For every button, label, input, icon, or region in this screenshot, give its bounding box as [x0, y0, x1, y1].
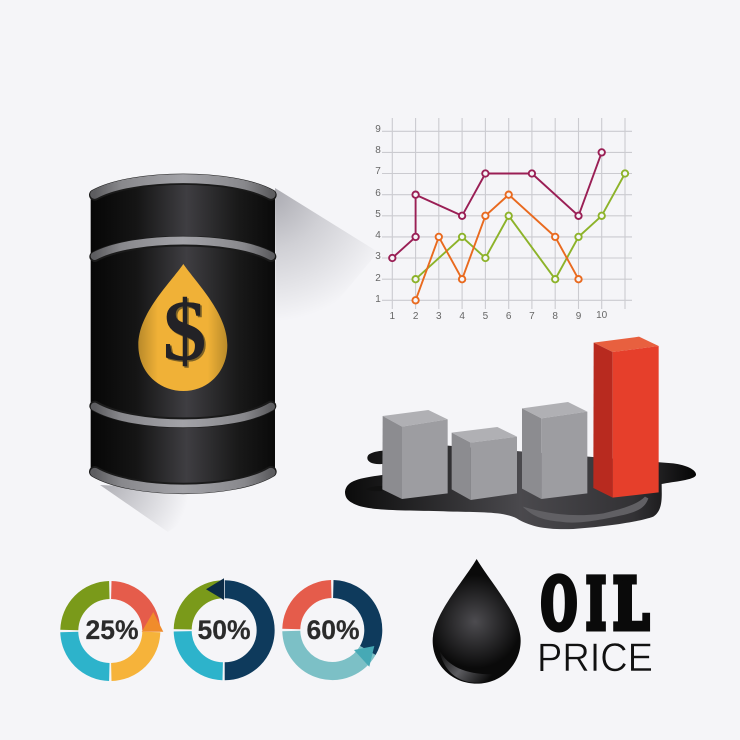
y axis labels: 3	[375, 251, 381, 262]
y axis labels: 2	[375, 273, 381, 284]
OIL	[541, 562, 649, 646]
x axis labels: 2	[413, 311, 419, 322]
arrow	[354, 646, 374, 667]
maroon series	[389, 149, 605, 261]
green series	[412, 170, 628, 282]
x axis labels: 3	[436, 311, 442, 322]
OIL: L	[613, 562, 649, 646]
y axis labels: 6	[375, 188, 381, 199]
arrow	[142, 612, 163, 632]
y axis labels: 5	[375, 209, 381, 220]
OIL: O	[541, 562, 577, 646]
y axis labels: 4	[375, 230, 381, 241]
y axis labels: 8	[375, 145, 381, 156]
x axis labels: 5	[483, 311, 489, 322]
label 50%: 50%	[197, 615, 251, 645]
x axis labels: 9	[576, 311, 582, 322]
donut 25%	[69, 590, 163, 672]
icon: gold oil drop with dollar sign: $	[164, 283, 208, 380]
bar 1	[382, 410, 448, 499]
bar 3	[522, 402, 587, 499]
barrel long shadow	[100, 188, 378, 532]
x axis labels: 1	[390, 311, 396, 322]
label 25%: 25%	[85, 615, 139, 645]
x axis labels	[390, 310, 608, 322]
label 60%: 60%	[306, 615, 360, 645]
x axis labels: 7	[529, 311, 535, 322]
arrow	[206, 578, 224, 600]
PRICE: PRICE	[537, 636, 653, 680]
x axis labels: 10	[596, 310, 608, 321]
orange series	[412, 192, 582, 303]
donut 60%	[291, 589, 374, 671]
title: OIL PRICE	[537, 562, 653, 680]
icon: gold oil drop with dollar sign: $	[163, 281, 207, 378]
y axis labels: 9	[375, 124, 381, 135]
y axis labels: 7	[375, 166, 381, 177]
OIL: I	[586, 562, 606, 646]
line chart	[375, 118, 632, 322]
bar chart on oil spill	[345, 337, 696, 529]
oil puddle	[345, 446, 696, 529]
icon: gold oil drop with dollar sign	[138, 264, 227, 391]
oil barrel	[91, 179, 275, 489]
x axis labels: 8	[552, 311, 558, 322]
y axis labels	[375, 124, 381, 305]
donut 50%	[183, 578, 266, 671]
chart grid	[382, 118, 632, 309]
x axis labels: 6	[506, 311, 512, 322]
icon: black oil drop	[433, 559, 521, 684]
x axis labels: 4	[459, 311, 465, 322]
bar 4 red	[593, 337, 659, 498]
bar 2	[452, 427, 517, 500]
y axis labels: 1	[375, 294, 381, 305]
